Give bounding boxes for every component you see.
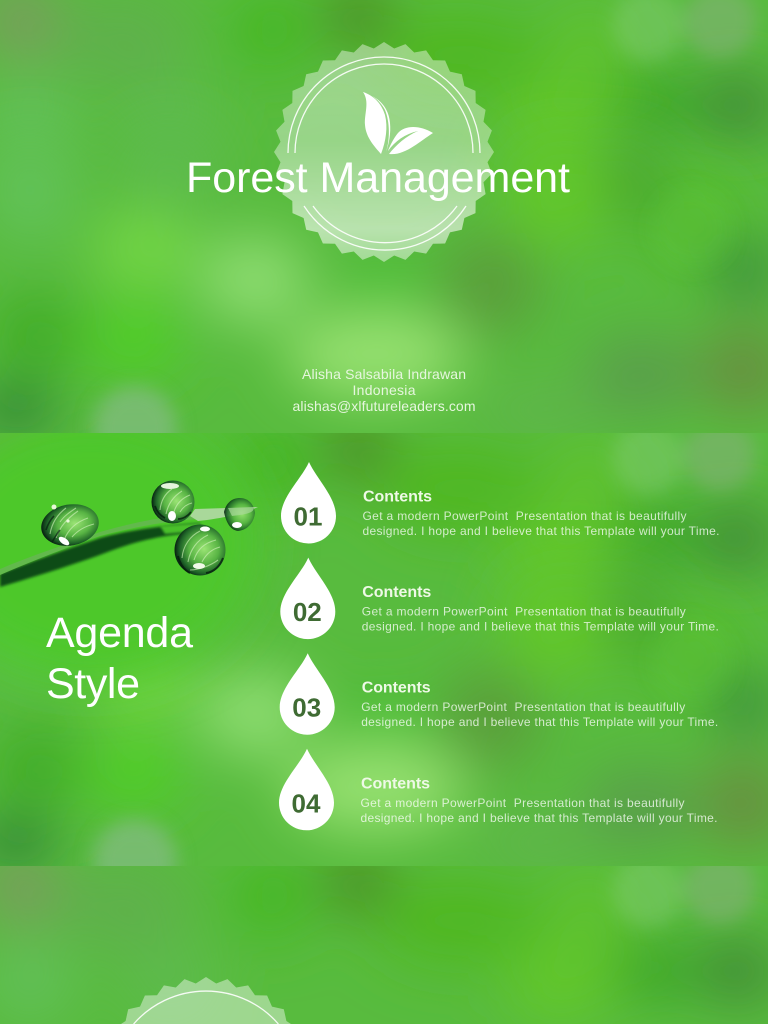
description 03 bbox=[361, 700, 718, 729]
icon: drop 03 bbox=[280, 653, 335, 735]
description 02: Get a modern PowerPoint Presentation that is beautifully bbox=[362, 605, 686, 619]
agenda item 04 bbox=[279, 749, 718, 830]
seal shape bbox=[121, 977, 291, 1024]
droplet 3 bbox=[174, 524, 226, 576]
description 03: Get a modern PowerPoint Presentation that is beautifully bbox=[361, 700, 685, 714]
number 04: 04 bbox=[292, 788, 321, 818]
droplet 1 bbox=[38, 500, 102, 550]
partial seal on slide 3 bbox=[121, 977, 291, 1024]
number 01: 01 bbox=[294, 502, 322, 532]
agenda item 02 bbox=[280, 558, 719, 639]
author details: Alisha Salsabila Indrawan bbox=[302, 366, 466, 382]
description 04 bbox=[360, 796, 718, 825]
agenda item 03 bbox=[280, 653, 718, 735]
heading: Agenda Style: Agenda bbox=[46, 609, 193, 657]
description 01: designed. I hope and I believe that this Template will your Time. bbox=[362, 524, 720, 538]
title: Forest Management bbox=[186, 154, 570, 202]
heading: Agenda Style bbox=[46, 609, 193, 708]
photo: grass blade with water droplets bbox=[0, 480, 258, 587]
droplet 2 bbox=[152, 480, 194, 524]
icon: drop 01 bbox=[281, 462, 336, 544]
slide 3 background bbox=[0, 866, 768, 1024]
number 03: 03 bbox=[292, 693, 321, 723]
heading: Agenda Style: Style bbox=[46, 660, 140, 708]
seal ring bbox=[134, 991, 278, 1024]
description 04: Get a modern PowerPoint Presentation that is beautifully bbox=[360, 796, 684, 810]
heading 04: Contents bbox=[361, 775, 430, 792]
description 03: designed. I hope and I believe that this Template will your Time. bbox=[361, 715, 718, 729]
description 02 bbox=[362, 605, 719, 634]
description 02: designed. I hope and I believe that this Template will your Time. bbox=[362, 620, 719, 634]
droplet 4 bbox=[224, 498, 255, 531]
seal shape bbox=[274, 42, 494, 262]
heading 02: Contents bbox=[362, 584, 431, 601]
heading 01: Contents bbox=[363, 488, 432, 506]
icon: drop 02 bbox=[280, 558, 335, 639]
author details: alishas@xlfutureleaders.com bbox=[292, 398, 476, 414]
icon: drop 04 bbox=[279, 749, 334, 830]
heading 03: Contents bbox=[362, 680, 431, 697]
seal rings bbox=[288, 57, 480, 250]
grass blade bbox=[0, 507, 258, 587]
author details bbox=[292, 366, 476, 414]
description 01 bbox=[362, 509, 720, 538]
slide 2 background bbox=[0, 433, 768, 866]
badge: scalloped seal with leaves bbox=[274, 42, 494, 262]
author details: Indonesia bbox=[352, 382, 416, 398]
description 04: designed. I hope and I believe that this Template will your Time. bbox=[360, 811, 718, 825]
agenda item 01 bbox=[281, 462, 720, 544]
description 01: Get a modern PowerPoint Presentation that is beautifully bbox=[362, 509, 686, 523]
number 02: 02 bbox=[293, 597, 322, 627]
icon: twin leaves bbox=[363, 92, 433, 154]
